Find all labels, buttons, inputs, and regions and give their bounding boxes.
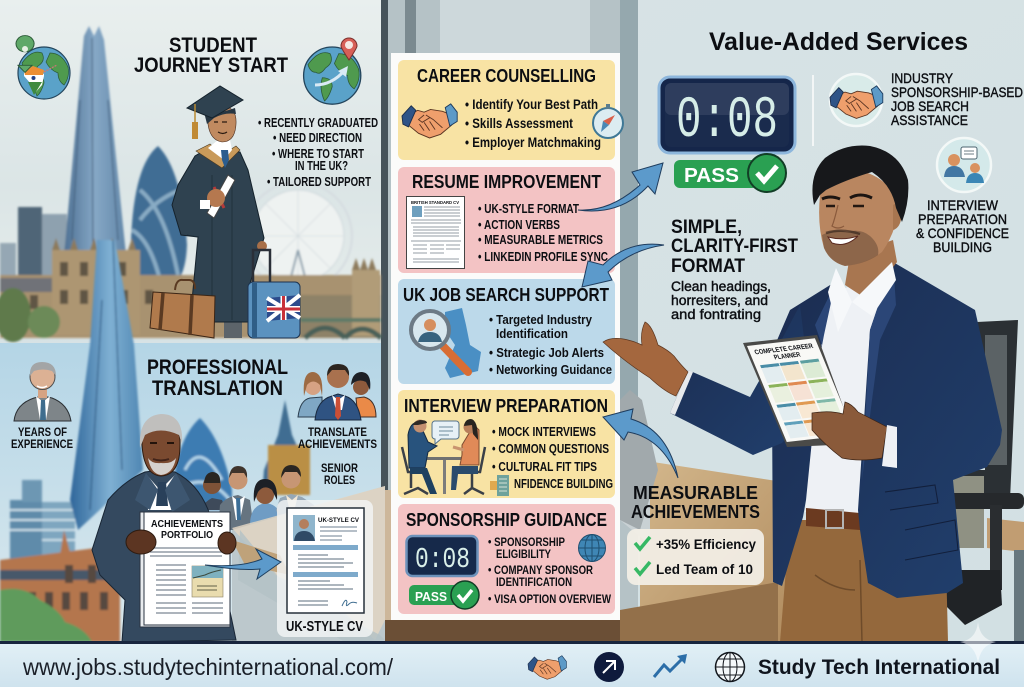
shirt bbox=[805, 263, 893, 515]
arrow: format to job search bbox=[582, 244, 664, 287]
illustration: interview at table bbox=[402, 419, 485, 494]
section: uk job search support: • Targeted Industry bbox=[489, 312, 593, 327]
uk-style cv card: UK-STYLE CV bbox=[318, 517, 360, 524]
label: years of experience: EXPERIENCE bbox=[11, 437, 73, 451]
achievements portfolio document: ACHIEVEMENTS bbox=[151, 518, 223, 530]
icon: india globe bbox=[16, 36, 70, 99]
tablet: complete career planner: PLANNER bbox=[773, 352, 802, 361]
callout: achievement checklist: +35% Efficiency bbox=[656, 536, 756, 552]
text block: student needs: IN THE UK? bbox=[295, 159, 348, 173]
icon: arrow in circle bbox=[594, 652, 624, 682]
achievements portfolio document: PORTFOLIO bbox=[161, 529, 213, 541]
section: resume improvement: • MEASURABLE METRICS bbox=[478, 232, 603, 247]
heading: student journey start bbox=[134, 34, 288, 77]
section: uk job search support: Identification bbox=[496, 326, 568, 341]
heading: professional translation: TRANSLATION bbox=[152, 377, 283, 400]
panel: student journey start bbox=[0, 0, 381, 342]
text: interview preparation: BUILDING bbox=[933, 239, 992, 255]
icon: handshake bbox=[402, 104, 457, 138]
open hand bbox=[603, 322, 688, 396]
text: industry sponsorship: JOB SEARCH bbox=[891, 98, 969, 114]
british standard cv thumbnail: BRITISH STANDARD CV bbox=[411, 200, 459, 205]
section: uk job search support bbox=[398, 279, 615, 384]
watermark sparkle bbox=[960, 622, 996, 664]
label: translate achievements bbox=[298, 425, 377, 451]
outstretched arm bbox=[670, 305, 812, 455]
text block: student needs: • NEED DIRECTION bbox=[273, 131, 362, 145]
section: career counselling bbox=[398, 60, 623, 160]
arrow: achievements to interview bbox=[603, 409, 678, 478]
text: measurable achievements bbox=[631, 482, 760, 522]
icon: globe bbox=[716, 652, 744, 682]
icon: uk destination globe bbox=[304, 38, 361, 104]
arrow: resume to timer bbox=[578, 163, 663, 211]
text: interview preparation bbox=[916, 197, 1009, 255]
icon: handshake badge bbox=[830, 74, 883, 126]
section: resume improvement: • LINKEDIN PROFILE SYNC bbox=[478, 249, 608, 264]
text: simple clarity-first format: FORMAT bbox=[671, 255, 745, 277]
text: measurable achievements: ACHIEVEMENTS bbox=[631, 501, 760, 522]
icon: digital timer bbox=[659, 77, 795, 154]
icon: brown suitcase bbox=[150, 280, 215, 338]
text block: student needs: • WHERE TO START bbox=[272, 147, 364, 161]
section: career counselling: • Skills Assessment bbox=[465, 116, 573, 131]
panel: services column bbox=[391, 53, 623, 620]
tablet: complete career planner: COMPLETE CAREER bbox=[754, 343, 815, 356]
text: simple clarity-first format: horresiters, and bbox=[671, 293, 768, 308]
section: career counselling: • Employer Matchmaking bbox=[465, 135, 601, 150]
text: interview preparation: INTERVIEW bbox=[927, 197, 999, 213]
section: sponsorship guidance: • COMPANY SPONSOR bbox=[488, 565, 594, 577]
heading: professional translation bbox=[147, 356, 288, 400]
uk-style cv card bbox=[277, 500, 373, 637]
text: simple clarity-first format: Clean headings, bbox=[671, 279, 771, 294]
section: sponsorship guidance: • VISA OPTION OVERVIEW bbox=[488, 594, 611, 606]
heading: professional translation: PROFESSIONAL bbox=[147, 356, 288, 379]
text: measurable achievements: MEASURABLE bbox=[633, 482, 758, 503]
label: translate achievements: TRANSLATE bbox=[308, 425, 367, 439]
icon: blue luggage with union flag bbox=[248, 250, 300, 338]
icon: handshake bbox=[528, 656, 566, 679]
section: interview preparation: • COMMON QUESTIONS bbox=[492, 441, 609, 456]
icon: mini pass badge: PASS bbox=[415, 589, 447, 604]
section: sponsorship guidance bbox=[398, 504, 615, 614]
text block: student needs: • TAILORED SUPPORT bbox=[267, 175, 371, 189]
achievements portfolio document bbox=[140, 512, 230, 627]
icon: magnifier over uk map bbox=[411, 308, 481, 378]
callout: achievement checklist: Led Team of 10 bbox=[656, 561, 753, 577]
section: interview preparation: INTERVIEW PREPARATION bbox=[404, 396, 608, 416]
heading: student journey start: STUDENT bbox=[169, 34, 257, 57]
label: senior roles: ROLES bbox=[324, 473, 355, 487]
section: interview preparation bbox=[398, 390, 615, 498]
text: simple clarity-first format: and fontrating bbox=[671, 307, 761, 322]
section: sponsorship guidance: SPONSORSHIP GUIDANCE bbox=[406, 510, 607, 530]
text: interview preparation: PREPARATION bbox=[918, 211, 1007, 227]
office chair bbox=[943, 320, 1024, 625]
blazer bbox=[772, 262, 1002, 598]
icon: globe bbox=[578, 534, 606, 562]
section: resume improvement bbox=[398, 167, 615, 273]
section: uk job search support: UK JOB SEARCH SUPPORT bbox=[403, 285, 609, 305]
heading: value-added services: Value-Added Services bbox=[709, 28, 968, 56]
label: senior roles bbox=[321, 461, 358, 487]
label: years of experience: YEARS OF bbox=[18, 425, 67, 439]
text block: student needs: • RECENTLY GRADUATED bbox=[258, 116, 378, 130]
section: career counselling: CAREER COUNSELLING bbox=[417, 66, 596, 86]
section: interview preparation: • CULTURAL FIT TIPS bbox=[492, 459, 597, 474]
badge: pass: PASS bbox=[684, 165, 739, 187]
text: simple clarity-first format bbox=[671, 216, 798, 322]
figure: senior man holding portfolio bbox=[92, 414, 236, 642]
text: industry sponsorship: ASSISTANCE bbox=[891, 112, 968, 128]
icon: mini timer: 0:08 bbox=[415, 543, 470, 576]
icon: compass bbox=[593, 104, 623, 138]
london skyline background bbox=[0, 26, 381, 342]
label: years of experience bbox=[11, 425, 73, 451]
text block: student needs bbox=[258, 116, 378, 189]
section: sponsorship guidance: ELIGIBILITY bbox=[496, 549, 551, 561]
icon: senior professional bbox=[14, 362, 71, 421]
head bbox=[819, 172, 898, 266]
icon: digital timer: 0:08 bbox=[676, 89, 778, 154]
section: interview preparation: NFIDENCE BUILDING bbox=[514, 476, 613, 491]
section: resume improvement: • ACTION VERBS bbox=[478, 217, 560, 232]
footer bar bbox=[0, 622, 1024, 687]
label: senior roles: SENIOR bbox=[321, 461, 358, 475]
figure: graduate student with luggage bbox=[150, 86, 300, 338]
tablet: complete career planner bbox=[743, 335, 855, 447]
callout: achievement checklist bbox=[627, 529, 764, 585]
section: sponsorship guidance: IDENTIFICATION bbox=[496, 577, 572, 589]
section: sponsorship guidance: • SPONSORSHIP bbox=[488, 537, 565, 549]
holding hand bbox=[812, 402, 887, 460]
icon: interview badge bbox=[937, 138, 991, 192]
icon: team of three bbox=[298, 364, 376, 420]
london skyline foreground bbox=[0, 240, 310, 642]
neck bbox=[845, 240, 897, 300]
text: simple clarity-first format: SIMPLE, bbox=[671, 216, 742, 238]
badge: pass bbox=[674, 154, 786, 192]
right scene: desk, laptop and chair bbox=[620, 320, 1024, 642]
uk-style cv card: UK-STYLE CV bbox=[286, 619, 363, 635]
table with glass overlay bbox=[232, 486, 385, 642]
icon: trend arrow bbox=[654, 654, 687, 677]
text: industry sponsorship: INDUSTRY bbox=[891, 70, 954, 86]
text: industry sponsorship bbox=[891, 70, 1023, 128]
icon: small buildings bbox=[490, 475, 509, 496]
trousers bbox=[780, 520, 948, 642]
icon: mini timer bbox=[406, 536, 478, 576]
figure: colleagues group bbox=[200, 465, 314, 530]
arrow: portfolio to cv bbox=[205, 549, 281, 579]
section: interview preparation: • MOCK INTERVIEWS bbox=[492, 424, 596, 439]
section: uk job search support: • Strategic Job Alerts bbox=[489, 345, 604, 360]
brand name: Study Tech International bbox=[758, 655, 1000, 679]
british standard cv thumbnail bbox=[406, 196, 464, 268]
label: translate achievements: ACHIEVEMENTS bbox=[298, 437, 377, 451]
panel: professional translation bbox=[0, 240, 385, 642]
section: resume improvement: RESUME IMPROVEMENT bbox=[412, 172, 601, 192]
icon: mini pass badge bbox=[409, 581, 479, 609]
section: uk job search support: • Networking Guidance bbox=[489, 362, 612, 377]
website url: www.jobs.studytechinternational.com/ bbox=[22, 654, 394, 680]
text: interview preparation: & CONFIDENCE bbox=[916, 225, 1009, 241]
section: resume improvement: • UK-STYLE FORMAT bbox=[478, 201, 579, 216]
heading: student journey start: JOURNEY START bbox=[134, 54, 288, 77]
text: simple clarity-first format: CLARITY-FIRST bbox=[671, 235, 798, 257]
figure: presenter with tablet bbox=[603, 146, 1002, 642]
section: career counselling: • Identify Your Best Path bbox=[465, 97, 598, 112]
